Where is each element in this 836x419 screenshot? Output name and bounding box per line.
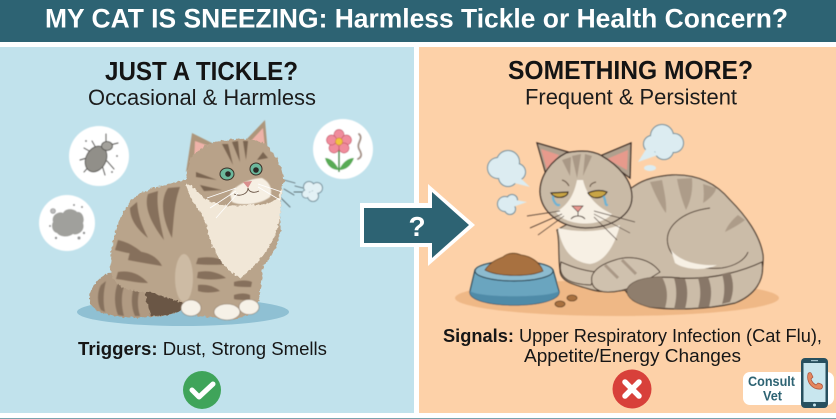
cat body stripes <box>115 187 252 300</box>
sad cat nose and mouth <box>572 206 583 212</box>
panel: just a tickle <box>0 47 414 413</box>
cat tail <box>90 272 188 318</box>
cat ground shadow <box>77 298 289 326</box>
sad cat whiskers <box>527 211 635 240</box>
subheading: occasional and harmless: Occasional & Harmless <box>88 85 316 110</box>
sad cat haunch <box>667 208 748 268</box>
arrow with question mark <box>360 184 475 266</box>
sad cat eyes with tears <box>551 180 607 205</box>
title banner: MY CAT IS SNEEZING: Harmless Tickle or Health Concern? <box>45 4 788 34</box>
cat whiskers <box>207 184 282 218</box>
signals text: Signals: Upper Respiratory Infection (Cat Flu), <box>443 325 822 346</box>
signals text: Appetite/Energy Changes <box>524 345 741 366</box>
sad cat chest <box>558 225 620 264</box>
consult vet callout: Consult <box>748 373 795 389</box>
panel: something more <box>419 47 836 413</box>
icon: flower with smell <box>313 119 373 179</box>
cat paws <box>181 300 259 320</box>
illustration: sneeze puff <box>281 180 323 207</box>
consult vet callout: Vet <box>763 388 782 404</box>
icon: green check <box>183 371 221 409</box>
icon: dust cloud <box>39 195 95 251</box>
floor shadow <box>455 280 779 316</box>
sad cat ears <box>537 143 631 178</box>
cat forehead stripes <box>196 141 268 191</box>
arrow with question mark: ? <box>408 211 426 242</box>
cat ears <box>186 120 268 172</box>
cat nose and mouth <box>243 181 252 188</box>
illustration: sneeze clouds <box>487 124 684 215</box>
cat head <box>186 139 284 206</box>
icon: phone <box>801 358 828 408</box>
sad cat haunch highlight <box>671 250 717 269</box>
sad cat side paw <box>560 262 596 285</box>
sad cat body stripes <box>650 178 745 232</box>
cat eyes <box>220 163 262 180</box>
icon: red cross <box>612 370 652 408</box>
heading: just a tickle: JUST A TICKLE? <box>105 56 298 86</box>
sad cat front paw <box>592 258 660 292</box>
cat belly highlight <box>175 254 193 302</box>
sad cat head <box>540 151 632 228</box>
triggers text: Triggers: Dust, Strong Smells <box>78 338 327 359</box>
icon: dust mite <box>69 126 129 186</box>
sad cat forehead stripes <box>562 154 592 178</box>
title banner <box>0 0 836 42</box>
heading: something more: SOMETHING MORE? <box>508 55 753 85</box>
illustration: sad grey tabby cat <box>527 143 763 309</box>
consult vet callout <box>743 358 834 408</box>
cat chest fur <box>186 184 282 278</box>
cat body <box>110 180 283 319</box>
sad cat face blaze <box>556 180 612 224</box>
illustration: fluffy tabby cat <box>77 120 289 326</box>
cat muzzle <box>230 178 271 204</box>
signals text <box>443 325 822 366</box>
sad cat body <box>557 175 763 308</box>
illustration: food bowl <box>455 253 779 316</box>
sad cat tail <box>627 262 763 309</box>
subheading: frequent and persistent: Frequent & Persistent <box>525 84 737 110</box>
cat tail stripes <box>98 281 141 316</box>
